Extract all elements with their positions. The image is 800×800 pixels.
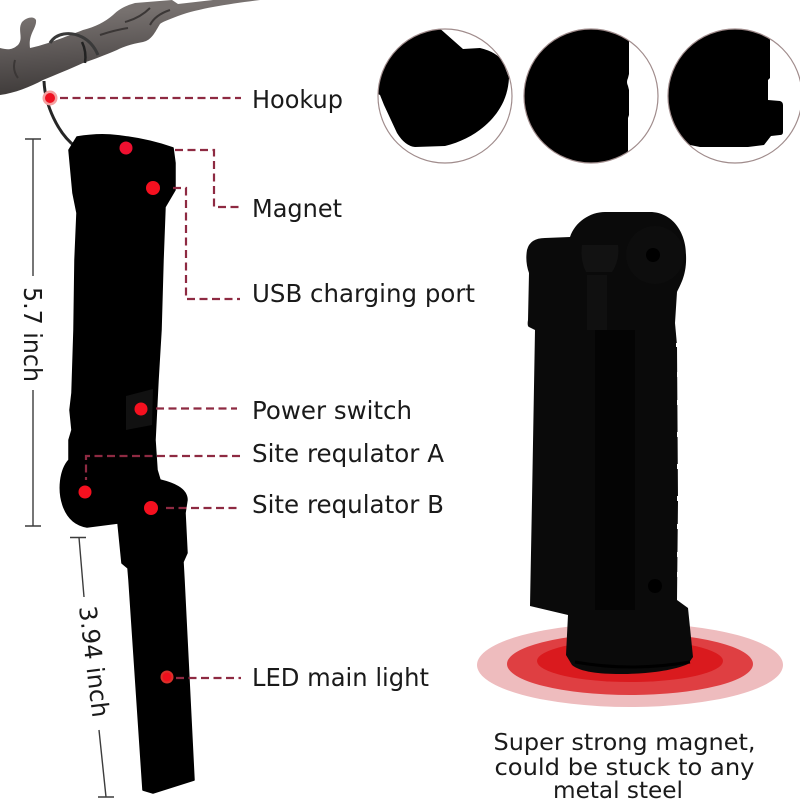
dimension: 5.7 inch xyxy=(18,139,47,526)
dimension: 5.7 inch: 5.7 inch xyxy=(18,287,47,382)
detail circle: head side xyxy=(520,20,658,165)
callout: Power switch: Power switch xyxy=(252,396,412,425)
caption: could be stuck to any xyxy=(494,753,755,781)
callout: Site requlator B: Site requlator B xyxy=(252,490,444,519)
magnetic field rings xyxy=(477,623,783,707)
caption: Super strong magnet, xyxy=(494,728,756,756)
tree branch xyxy=(0,0,260,95)
callout: Power switch xyxy=(134,396,412,425)
dimension: 3.94 inch xyxy=(70,538,114,797)
callout: Hookup: Hookup xyxy=(252,85,343,114)
power switch panel xyxy=(126,389,153,430)
folded flashlight xyxy=(526,212,693,674)
caption xyxy=(494,728,756,800)
callout: LED main light: LED main light xyxy=(252,663,429,692)
callout: Site requlator B xyxy=(144,490,444,519)
hook xyxy=(44,34,98,147)
callout: Hookup xyxy=(42,85,343,114)
callout: USB charging port: USB charging port xyxy=(252,279,475,308)
callout: Site requlator A: Site requlator A xyxy=(252,439,444,468)
callout: LED main light xyxy=(160,663,429,692)
detail circle: head top xyxy=(370,20,512,163)
magnet knob xyxy=(626,226,684,284)
dimension: 3.94 inch: 3.94 inch xyxy=(73,604,114,719)
callout: Site requlator A xyxy=(78,439,444,498)
callout: Magnet xyxy=(120,142,342,223)
callout: Magnet: Magnet xyxy=(252,194,342,223)
callout: USB charging port xyxy=(146,181,475,308)
detail circle: switch side xyxy=(660,20,800,163)
main flashlight body xyxy=(60,135,194,793)
